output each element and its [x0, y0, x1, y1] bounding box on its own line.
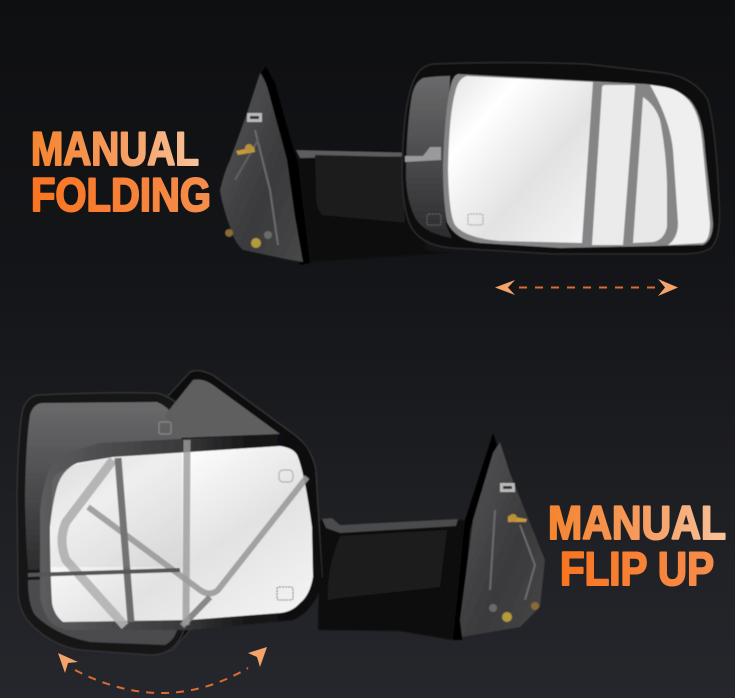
heading: manual folding: MANUAL	[31, 122, 199, 175]
ghost glass upper	[25, 402, 182, 570]
main glass	[50, 446, 313, 622]
mirror: manual folding (top)	[220, 62, 720, 265]
glass overlay divider lines	[28, 440, 307, 626]
main frame	[40, 434, 322, 630]
ghost tint on glass	[50, 452, 182, 567]
mirror: manual flip up (bottom)	[17, 371, 545, 655]
mirror arm	[318, 518, 465, 640]
second glass pane	[592, 85, 635, 245]
ghost panel	[406, 76, 452, 238]
ghost glass upper right	[165, 380, 280, 438]
ghost mirror: rotated, dark frame	[57, 371, 322, 655]
main glass pane	[448, 76, 593, 243]
heading: manual folding	[31, 122, 211, 221]
third glass pane	[633, 97, 667, 243]
defrost icon	[468, 214, 483, 225]
frame interior	[443, 74, 713, 248]
heading: manual flip up: FLIP UP	[560, 542, 714, 595]
ghost mirror: flipped, dark frame	[17, 393, 190, 655]
heading: manual folding: FOLDING	[31, 168, 211, 221]
defrost icon	[277, 587, 293, 600]
ghost defrost icon	[427, 214, 441, 225]
fourth glass pane	[650, 85, 710, 245]
translucent arm overlay	[405, 147, 441, 162]
mounting plate	[453, 433, 545, 640]
heading: manual flip up	[548, 496, 726, 595]
mirror head frame	[402, 62, 720, 254]
arrow: curved flip	[58, 647, 267, 693]
ghost glass lower	[28, 575, 178, 645]
mirror arm	[296, 147, 450, 262]
mounting plate	[220, 66, 310, 265]
ghost defrost icons	[159, 422, 293, 482]
arrow: horizontal fold	[495, 279, 678, 296]
